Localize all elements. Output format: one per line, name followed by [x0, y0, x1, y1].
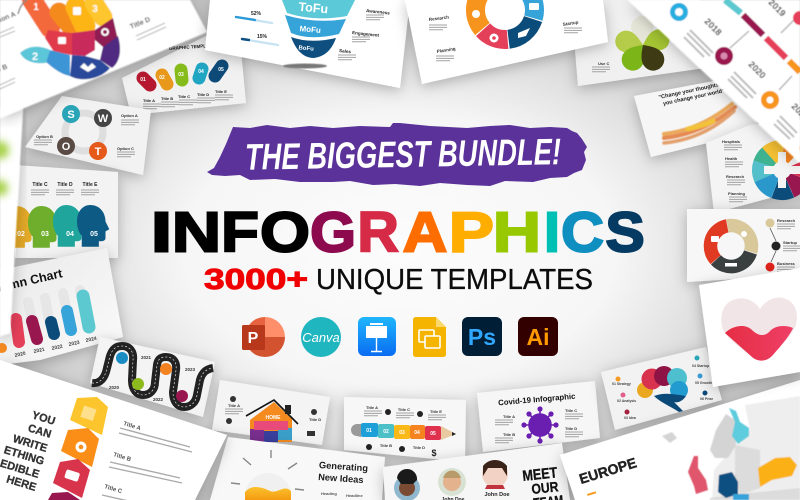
- ring: [65, 113, 103, 151]
- panel: SWOT: [25, 96, 151, 175]
- years: [703, 0, 800, 122]
- head titles: Title E: [83, 182, 98, 188]
- road: [92, 346, 213, 407]
- panel: blurred left card: [0, 108, 23, 336]
- title: I: [151, 200, 172, 264]
- donut labels: Planning: [436, 46, 456, 54]
- covid labels: Title C: [565, 408, 577, 413]
- progress bars: 15%: [257, 34, 268, 40]
- slogan text: YOU: [30, 409, 57, 428]
- panel: quote card: [634, 77, 760, 157]
- icon: Illustrator: Ai: [526, 324, 550, 350]
- funnel stages: BoFu: [298, 45, 314, 53]
- house labels: Title D: [309, 417, 321, 422]
- pin numbers: 04: [198, 69, 204, 75]
- covid labels: [503, 408, 577, 437]
- cycle segments: [755, 143, 800, 197]
- option labels: Option C: [117, 146, 134, 151]
- top labels: Title E: [430, 409, 442, 414]
- icon: PowerPoint: [242, 317, 285, 357]
- title: I: [544, 200, 560, 264]
- year labels: 2020: [14, 351, 27, 359]
- T circle: T: [95, 146, 102, 158]
- year labels: 2023: [68, 340, 81, 348]
- option labels: Option B: [36, 134, 53, 139]
- palm and thumb: 2: [32, 51, 38, 63]
- steps: Business: [777, 261, 796, 266]
- item text: Title C: [103, 484, 123, 495]
- title: S: [605, 200, 645, 264]
- funnel stages: ToFu: [298, 0, 329, 16]
- pencil shape: 05: [430, 431, 436, 437]
- head titles: Title C: [32, 182, 48, 188]
- icon: Google Slides: [413, 317, 446, 357]
- icon: Canva: [301, 317, 341, 357]
- panel: heads chart: [3, 165, 118, 258]
- road years: 2023: [185, 367, 196, 372]
- brain labels: 04 Startup: [692, 364, 709, 368]
- cycle labels: [722, 139, 745, 196]
- icon: PowerPoint: P: [248, 330, 259, 347]
- house labels: [228, 403, 321, 422]
- cycle labels: Health: [725, 156, 738, 161]
- icon: Photoshop: Ps: [468, 324, 496, 350]
- panel: Europe map: [560, 380, 800, 500]
- funnel labels: Sales: [339, 48, 352, 54]
- heading: OUR: [531, 478, 559, 497]
- title: [151, 200, 645, 264]
- brain labels: 01 Strategy: [612, 382, 631, 386]
- slogan text: ETHING: [2, 444, 46, 468]
- slogan text: CAN: [26, 422, 53, 441]
- ring: [702, 217, 760, 275]
- icon: Keynote: [358, 317, 396, 356]
- road years: 2020: [109, 385, 120, 390]
- pin numbers: 01: [140, 77, 146, 83]
- road markers: [116, 352, 188, 402]
- brain labels: [612, 364, 713, 420]
- years: 2018: [703, 16, 724, 37]
- title: C: [561, 200, 604, 264]
- icon: Photoshop: [462, 317, 502, 356]
- timeline bar: [725, 0, 800, 72]
- head titles: [32, 182, 98, 188]
- brush strokes: [664, 104, 735, 143]
- item text: Title B: [112, 452, 132, 463]
- heading: MEET: [522, 464, 558, 485]
- donut labels: [429, 15, 579, 54]
- panel: house: [212, 380, 330, 445]
- progress bars: 52%: [251, 11, 262, 17]
- head titles: Title D: [57, 182, 73, 188]
- subtitle: UNIQUE TEMPLATES: [316, 264, 593, 296]
- donut segments: [463, 0, 547, 52]
- panel: hand infographic: [0, 0, 207, 118]
- S circle: S: [67, 109, 75, 121]
- title: F: [221, 200, 259, 264]
- slogan text: WRITE: [11, 433, 49, 455]
- hand labels: [0, 11, 151, 75]
- palm and thumb: 3: [92, 4, 98, 15]
- white centre cross: [764, 152, 800, 188]
- item text: [103, 421, 142, 495]
- brain lobes: [637, 366, 688, 412]
- flower labels: Use C: [598, 61, 609, 66]
- year labels: [14, 336, 98, 359]
- pencil shape: 03: [399, 430, 405, 436]
- portraits: [394, 460, 508, 500]
- covid title: Covid-19 Infographic: [498, 392, 576, 407]
- panel: lightbulb pins template: [122, 35, 246, 115]
- panel: brain: [601, 347, 722, 430]
- donut icons: [472, 3, 539, 42]
- covid labels: Title B: [503, 432, 515, 437]
- icon: Illustrator: [518, 317, 558, 356]
- item text: Title A: [122, 421, 142, 432]
- small labels: [321, 491, 363, 498]
- palm and thumb: [20, 2, 120, 79]
- year labels: 2024: [85, 336, 98, 344]
- panel: funnel: [205, 0, 410, 88]
- title: G: [310, 200, 356, 264]
- donut labels: Research: [429, 15, 449, 22]
- heart: [721, 298, 797, 361]
- quote text: "Change your thoughts: [658, 82, 719, 101]
- arrow stack: [48, 397, 108, 500]
- pin labels: Title B: [161, 96, 173, 101]
- heading: New Ideas: [318, 472, 364, 485]
- slogan text: [0, 409, 57, 494]
- steps: Startup: [783, 240, 798, 245]
- bulb: [231, 450, 304, 500]
- top labels: Title D: [413, 445, 425, 450]
- heading: Generating: [319, 460, 369, 473]
- heading: EUROPE: [577, 454, 638, 487]
- funnel stages: MoFu: [299, 24, 321, 35]
- funnel labels: Engagement: [352, 30, 380, 38]
- head icons: [3, 205, 109, 248]
- slogan text: HERE: [5, 473, 38, 494]
- panel: cycle: [706, 120, 800, 213]
- pin labels: Title D: [197, 92, 209, 97]
- funnel stages: [282, 0, 355, 58]
- brain labels: 03 Idea: [624, 416, 636, 420]
- head icons: 02: [17, 231, 25, 238]
- capsule tracks: [28, 290, 83, 320]
- brain labels: 06 Prize: [700, 397, 713, 401]
- W circle: W: [98, 113, 109, 125]
- pin numbers: [140, 67, 224, 83]
- panel: covid: [477, 381, 600, 452]
- panel: meet our team: [383, 443, 570, 500]
- small labels: Headline: [346, 493, 363, 498]
- subtitle: [204, 264, 593, 296]
- road years: [109, 355, 196, 402]
- panel: triangle cycle: [687, 209, 800, 282]
- brain labels: 02 Analysis: [617, 399, 636, 403]
- banner: brush: [207, 123, 587, 186]
- house labels: Title A: [228, 403, 240, 408]
- panel: column chart: [0, 248, 123, 365]
- palm and thumb: 1: [33, 2, 39, 13]
- panel: heart: [699, 268, 800, 387]
- top labels: Title A: [366, 405, 378, 410]
- pin labels: Title A: [143, 98, 155, 103]
- house body: HOME: [266, 415, 281, 421]
- pins row: [143, 66, 222, 85]
- quote text: you change your world": [663, 88, 726, 107]
- pin labels: GRAPHIC TEMPL: [169, 43, 206, 51]
- pencil icons: $: [431, 448, 437, 458]
- heading: [522, 464, 564, 500]
- road years: 2022: [153, 397, 164, 402]
- pencil shape: 04: [414, 430, 420, 436]
- fingers: [32, 0, 103, 28]
- pin labels: [143, 43, 227, 103]
- steps: Research: [777, 218, 796, 223]
- option labels: Option A: [121, 113, 138, 118]
- name: John Doe: [484, 492, 510, 498]
- orange bar fragment: [0, 343, 7, 353]
- cycle labels: Hospitals: [722, 139, 741, 144]
- funnel shadow: [283, 64, 327, 68]
- year labels: 2021: [33, 347, 46, 355]
- hand labels: Title D: [129, 16, 151, 31]
- banner text: THE BIGGEST BUNDLE!: [245, 131, 561, 178]
- progress bars: [236, 11, 278, 45]
- nodes: [670, 3, 800, 109]
- cycle labels: Research: [726, 174, 745, 179]
- year labels: 2022: [51, 344, 64, 352]
- donut labels: Startup: [562, 20, 579, 27]
- panel: green flower: [575, 0, 705, 86]
- panel: donut: [405, 0, 608, 84]
- icon: Canva: Canva: [302, 330, 340, 345]
- head icons: 05: [90, 231, 98, 238]
- pin numbers: 03: [178, 72, 184, 78]
- pin numbers: 05: [218, 67, 224, 73]
- panel: road timeline: [90, 337, 215, 417]
- green blobs: [0, 141, 9, 196]
- funnel labels: [339, 8, 390, 54]
- head icons: 03: [41, 231, 49, 238]
- top labels: [366, 405, 442, 450]
- panel: pencil: [344, 397, 466, 462]
- brain labels: 05 Growth: [695, 381, 712, 385]
- funnel labels: Awareness: [366, 8, 390, 16]
- title: R: [358, 200, 399, 264]
- O circle: O: [62, 141, 71, 153]
- small labels: Heading: [321, 491, 337, 496]
- head icons: 04: [66, 231, 74, 238]
- virus icon: [522, 407, 558, 443]
- pin labels: Title E: [215, 89, 227, 94]
- title: N: [172, 200, 221, 264]
- panel: timeline: [628, 0, 800, 163]
- covid labels: Title A: [503, 414, 515, 419]
- map: [662, 396, 800, 500]
- panel: generating ideas: [210, 437, 385, 500]
- top labels: Title B: [380, 443, 392, 448]
- road years: 2021: [141, 355, 152, 360]
- cycle labels: Planning: [728, 191, 745, 196]
- pencil shape: 02: [383, 429, 389, 435]
- years: 2020: [747, 59, 768, 80]
- title: O: [260, 200, 310, 264]
- option labels: [36, 113, 138, 151]
- steps: [766, 218, 798, 272]
- pencil shape: [351, 423, 456, 440]
- capsule bars: [16, 296, 89, 342]
- pin numbers: 02: [159, 75, 165, 81]
- panel: you can write: [0, 360, 227, 500]
- flower petals: [613, 16, 672, 75]
- title: P: [449, 200, 494, 264]
- covid labels: Title D: [565, 426, 577, 431]
- subtitle: 3000+: [204, 264, 308, 296]
- pencil shape: 01: [366, 428, 372, 434]
- pin labels: Title C: [178, 94, 190, 99]
- title: A: [403, 200, 447, 264]
- connectors: [730, 14, 800, 90]
- top labels: Title C: [398, 407, 410, 412]
- title: H: [493, 200, 541, 264]
